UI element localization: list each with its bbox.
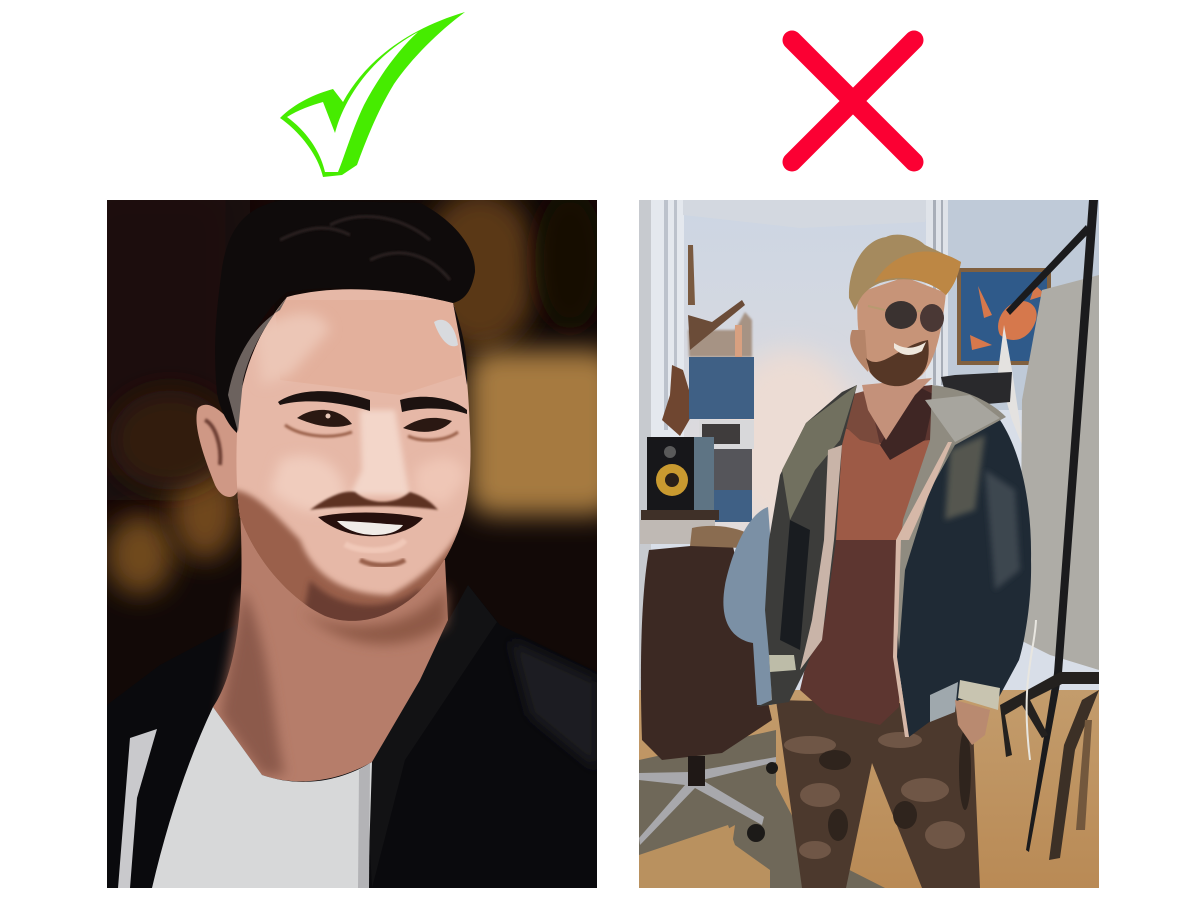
white t-shirt — [152, 707, 372, 888]
speaker — [647, 437, 697, 510]
jacket — [108, 623, 546, 705]
mustache and nose shadow — [310, 492, 438, 510]
microwave — [714, 420, 754, 449]
floor — [639, 690, 1099, 888]
camo trousers — [776, 700, 980, 888]
sleeve cuff — [958, 680, 1000, 710]
camera light — [941, 372, 1012, 405]
office chair — [639, 526, 778, 845]
sunglasses — [885, 301, 917, 329]
head — [857, 277, 946, 385]
grey jacket on chair — [723, 507, 772, 705]
hair — [215, 200, 475, 433]
ear — [196, 405, 238, 497]
neck and chest — [213, 510, 448, 781]
hand in pocket — [955, 700, 990, 745]
eyebrows — [278, 391, 370, 411]
jacket right side — [897, 420, 1031, 737]
blue cabinet — [689, 357, 754, 419]
eyes — [297, 410, 352, 427]
light stand — [1026, 200, 1098, 852]
plastic bag — [998, 325, 1022, 443]
beard — [866, 340, 929, 386]
cap — [849, 235, 961, 310]
shelf clutter and ship model — [688, 312, 752, 357]
neck — [862, 378, 932, 440]
room background — [639, 200, 1099, 888]
speaker stand — [641, 510, 719, 520]
dried plant — [662, 365, 690, 436]
mouth — [318, 513, 423, 536]
blurred warm bokeh background — [60, 170, 618, 595]
photo: good portrait, smiling man against dark blurred background — [107, 200, 597, 888]
photo: bad portrait, man in cluttered studio room — [639, 200, 1099, 888]
icon: green check mark — [280, 12, 465, 177]
man — [756, 235, 1031, 888]
icon: red cross mark — [792, 40, 914, 162]
painting — [957, 268, 1051, 365]
t-shirt — [800, 385, 932, 725]
jacket left side — [756, 385, 857, 707]
hoodie string — [118, 729, 157, 888]
face — [236, 289, 470, 621]
backdrop screen — [1020, 275, 1099, 670]
